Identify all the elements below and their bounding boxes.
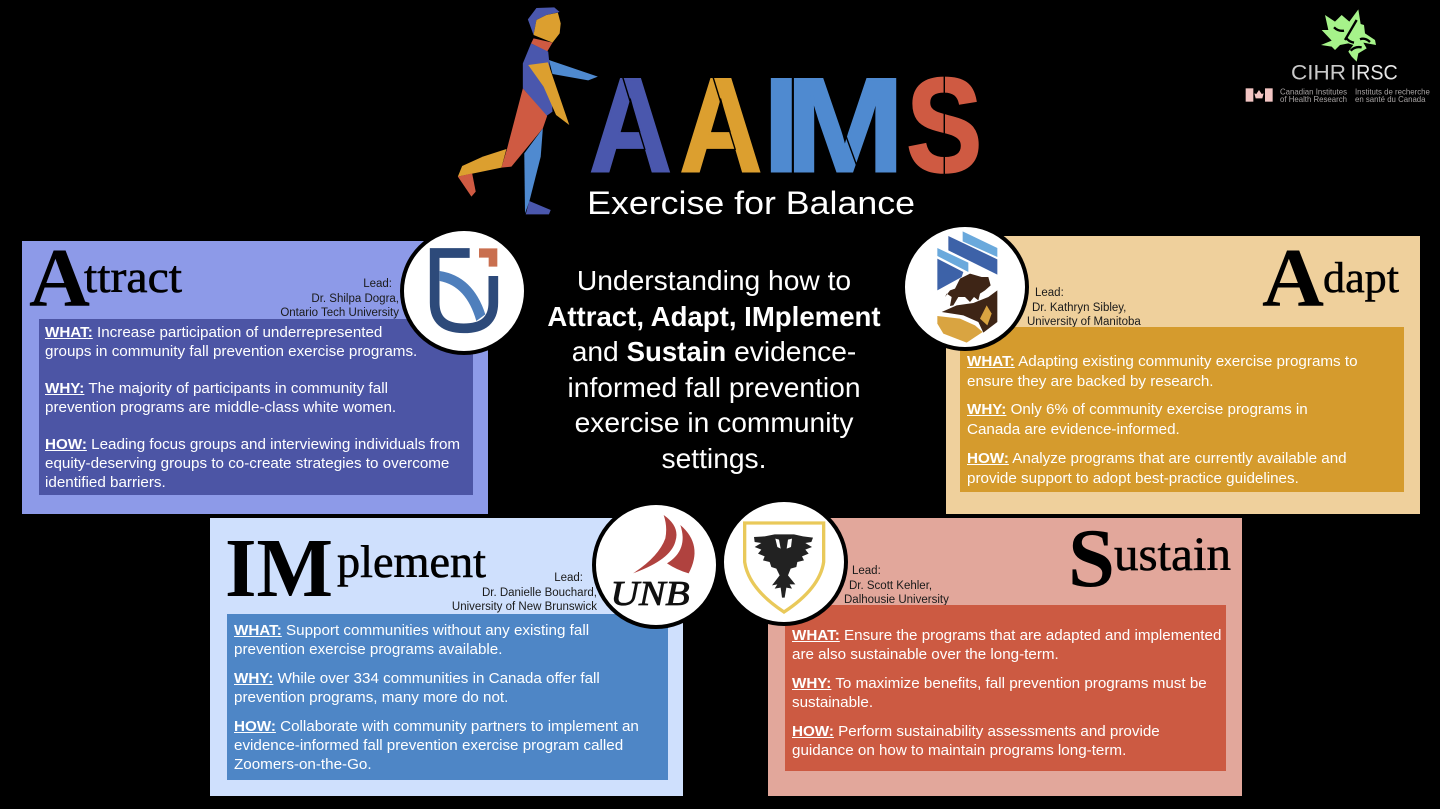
- text box: IMplement: WHY: While over 334 communities in Canada offer fall: [234, 670, 600, 687]
- text box: Adapt: WHAT: Adapting existing community exercise programs to: [967, 353, 1358, 370]
- text box: Attract: equity-deserving groups to co-create strategies to overcome: [45, 455, 449, 472]
- lead: IMplement: [452, 572, 597, 613]
- lead: IMplement: University of New Brunswick: [452, 601, 597, 613]
- logo: AAIMS Exercise for Balance: I: [762, 51, 802, 200]
- lead: Adapt: [1027, 287, 1141, 328]
- central statement: Understanding how to: [577, 264, 851, 296]
- text box: Sustain: are also sustainable over the long-term.: [792, 646, 1059, 663]
- text box: Sustain: sustainable.: [792, 694, 873, 711]
- heading: Attract: ttract: [84, 251, 182, 302]
- panel: Sustain: [768, 518, 1242, 796]
- icon: UNB logo: UNB: [610, 574, 690, 613]
- logo: CIHR IRSC: of Health Research: [1280, 95, 1347, 104]
- logo: CIHR IRSC: [1246, 10, 1430, 104]
- lead: Sustain: Dalhousie University: [844, 594, 949, 606]
- text box: Adapt: [960, 327, 1404, 492]
- logo: CIHR IRSC: CIHR: [1291, 60, 1346, 84]
- text box: Attract: WHAT: Increase participation of underrepresented: [45, 324, 382, 341]
- central statement: exercise in community: [575, 406, 853, 438]
- text box: IMplement: [227, 614, 668, 780]
- text box: Sustain: WHY: To maximize benefits, fall prevention programs must be: [792, 675, 1207, 692]
- text box: Attract: [39, 319, 473, 495]
- heading: Sustain: ustain: [1114, 528, 1231, 581]
- lead: Attract: Ontario Tech University: [280, 307, 399, 319]
- heading: Attract: [29, 241, 182, 319]
- lead: Sustain: [844, 565, 949, 606]
- text box: Sustain: [785, 605, 1226, 771]
- icon: University of Manitoba logo: [901, 223, 1029, 351]
- logo: AAIMS Exercise for Balance: S: [906, 51, 982, 200]
- logo: CIHR IRSC: en santé du Canada: [1355, 95, 1426, 104]
- text box: Attract: WHY: The majority of participants in community fall: [45, 380, 388, 397]
- lead: Attract: Lead:: [363, 278, 392, 290]
- logo: AAIMS Exercise for Balance: A: [589, 51, 672, 200]
- text box: Adapt: WHY: Only 6% of community exercise programs in: [967, 401, 1308, 418]
- central statement: Attract, Adapt, IMplement: [547, 300, 881, 332]
- icon: Dalhousie logo: [720, 498, 848, 626]
- panel: Attract: [22, 241, 488, 514]
- lead: IMplement: Lead:: [554, 572, 583, 584]
- text box: Sustain: WHAT: Ensure the programs that are adapted and implemented: [792, 627, 1221, 644]
- logo: CIHR IRSC: IRSC: [1351, 60, 1398, 84]
- panel: IMplement: [210, 518, 683, 796]
- text box: IMplement: Zoomers-on-the-Go.: [234, 756, 372, 773]
- heading: Adapt: dapt: [1323, 255, 1399, 302]
- lead: Adapt: Lead:: [1035, 287, 1064, 299]
- text box: Attract: prevention programs are middle-class white women.: [45, 399, 396, 416]
- text box: IMplement: WHAT: Support communities without any existing fall: [234, 622, 589, 639]
- text box: IMplement: prevention exercise programs available.: [234, 641, 502, 658]
- text box: IMplement: HOW: Collaborate with community partners to implement an: [234, 718, 639, 735]
- lead: IMplement: Dr. Danielle Bouchard,: [482, 586, 597, 598]
- icon: UNB logo: [592, 501, 720, 629]
- logo: CIHR IRSC: Instituts de recherche: [1355, 87, 1430, 96]
- text box: Adapt: ensure they are backed by research.: [967, 373, 1214, 390]
- logo: AAIMS Exercise for Balance: A: [680, 51, 762, 200]
- text box: Adapt: HOW: Analyze programs that are currently available and: [967, 450, 1347, 467]
- text box: IMplement: prevention programs, many more do not.: [234, 689, 508, 706]
- text box: Attract: identified barriers.: [45, 474, 166, 491]
- icon: Ontario Tech logo: [400, 227, 528, 355]
- text box: Sustain: HOW: Perform sustainability assessments and provide: [792, 723, 1160, 740]
- logo: AAIMS Exercise for Balance: [458, 7, 982, 222]
- logo: CIHR IRSC: Canadian Institutes: [1280, 87, 1347, 96]
- text box: IMplement: evidence-informed fall prevention exercise program called: [234, 737, 623, 754]
- lead: Sustain: Lead:: [852, 565, 881, 577]
- heading: IMplement: [225, 522, 486, 608]
- lead: Adapt: Dr. Kathryn Sibley,: [1032, 302, 1126, 314]
- panel: Adapt: [946, 236, 1420, 514]
- logo: AAIMS Exercise for Balance: M: [785, 51, 905, 200]
- text box: Attract: HOW: Leading focus groups and interviewing individuals from: [45, 436, 460, 453]
- lead: Sustain: Dr. Scott Kehler,: [849, 580, 932, 592]
- heading: IMplement: plement: [337, 536, 486, 587]
- central statement: settings.: [662, 442, 766, 474]
- heading: Sustain: [1068, 518, 1231, 603]
- central statement: and Sustain evidence-: [572, 335, 856, 367]
- lead: Attract: Dr. Shilpa Dogra,: [311, 292, 399, 304]
- text box: Sustain: guidance on how to maintain programs long-term.: [792, 742, 1126, 759]
- central statement: informed fall prevention: [568, 370, 860, 402]
- central statement: [547, 264, 881, 474]
- heading: Adapt: [1262, 236, 1399, 325]
- logo: AAIMS Exercise for Balance: Exercise for Balance: [587, 186, 915, 222]
- lead: Attract: [280, 278, 399, 319]
- text box: Attract: groups in community fall prevention exercise programs.: [45, 343, 417, 360]
- text box: Adapt: Canada are evidence-informed.: [967, 421, 1180, 438]
- text box: Adapt: provide support to adopt best-practice guidelines.: [967, 470, 1299, 487]
- lead: Adapt: University of Manitoba: [1027, 316, 1141, 328]
